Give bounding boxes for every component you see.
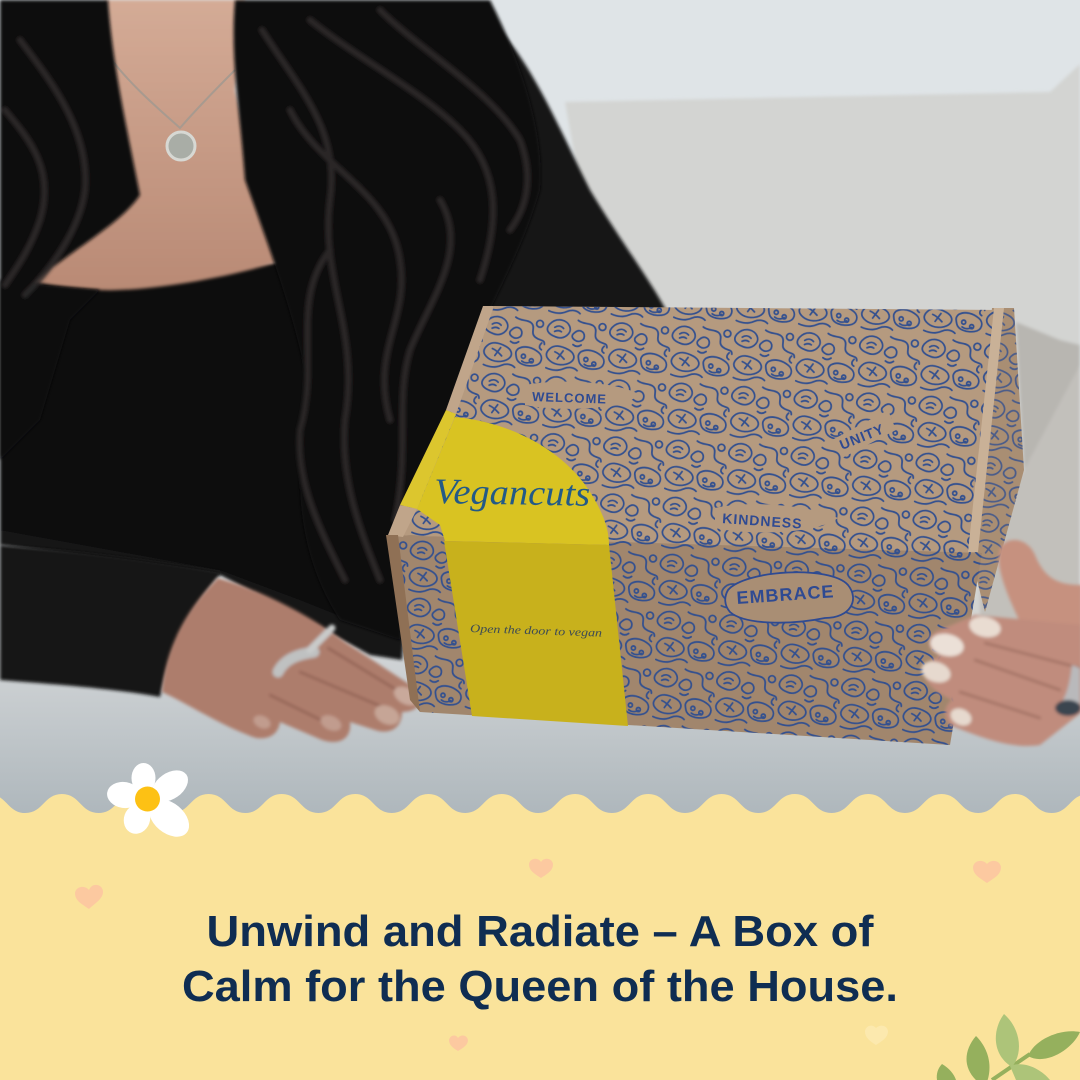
woman: black sweater and top — [0, 30, 666, 660]
icon: heart centre — [529, 859, 553, 878]
wavy yellow footer panel — [0, 794, 1080, 1080]
photo background: wall — [0, 0, 1080, 760]
box: logo: Vegancuts — [434, 471, 591, 514]
box: front face — [390, 535, 982, 745]
box: yellow folded edge — [400, 410, 456, 509]
box: doodle artwork side flap — [970, 308, 1024, 612]
box: yellow label on front — [444, 541, 628, 726]
box: doodle word kindness: KINDNESS — [722, 510, 803, 532]
icon: heart bottom — [449, 1036, 468, 1051]
headline — [182, 907, 898, 1011]
woman: chest and neck skin — [30, 0, 278, 290]
box: left corner edge — [386, 535, 420, 712]
woman: necklace with pendant — [108, 55, 235, 160]
box: doodle word welcome — [525, 382, 640, 409]
box: doodle word welcome: WELCOME — [532, 389, 607, 407]
icon: green leaf sprig — [937, 1014, 1080, 1080]
box: doodle word unity — [832, 410, 896, 458]
box: tagline: Open the door to vegan — [470, 623, 603, 640]
woman: long dark wavy hair — [0, 0, 541, 640]
icon: heart left — [75, 885, 103, 909]
woman: left sleeve cuff — [0, 545, 222, 697]
left hand with rings — [162, 578, 421, 742]
box: doodle artwork front — [390, 535, 982, 745]
box: right side flap — [970, 308, 1024, 612]
box: yellow label on top — [417, 417, 609, 545]
headline: Unwind and Radiate – A Box of — [206, 907, 874, 956]
box: folded left edge lower — [388, 505, 417, 537]
box: doodle artwork top — [390, 306, 1002, 555]
box: top face — [390, 306, 1002, 555]
icon: white daisy flower — [105, 763, 196, 844]
box: light right flap edge — [968, 308, 1004, 552]
box: embrace cloud — [725, 572, 853, 623]
icon: faint heart bottom right — [865, 1026, 888, 1045]
vegan subscription box — [386, 306, 1024, 745]
box: doodle word unity: UNITY — [837, 420, 887, 453]
box: embrace cloud: EMBRACE — [736, 581, 835, 608]
right hand holding box — [919, 540, 1080, 746]
headline: Calm for the Queen of the House. — [182, 962, 898, 1011]
photo background: sofa cushions — [565, 64, 1080, 760]
icon: heart right — [973, 861, 1001, 883]
table top — [0, 650, 1080, 820]
box: folded left edge upper — [446, 306, 494, 414]
box: doodle word kindness — [715, 504, 838, 532]
